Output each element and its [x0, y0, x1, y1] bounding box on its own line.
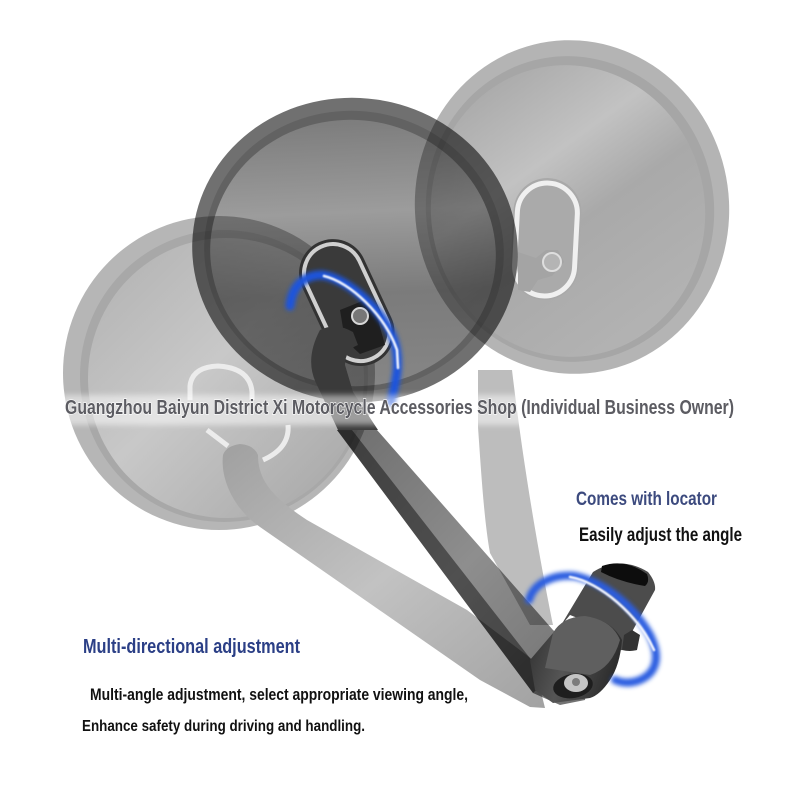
banner band — [62, 395, 752, 425]
right ghost mirror — [393, 20, 751, 394]
locator joint — [530, 563, 655, 703]
heading: multi-directional: Multi-directional adjustment — [83, 636, 300, 658]
central dark arm — [337, 430, 590, 705]
mirror slot — [288, 228, 406, 377]
left ghost mirror — [63, 216, 375, 530]
heading: comes with locator: Comes with locator — [576, 489, 717, 510]
mirror arm neck — [311, 326, 378, 430]
left ghost arm — [223, 444, 545, 708]
text: multi-angle: Multi-angle adjustment, select appropriate viewing angle, — [90, 685, 468, 704]
central dark mirror — [172, 77, 538, 423]
text: enhance safety: Enhance safety during driving and handling. — [82, 718, 365, 735]
blue arc: locator — [529, 576, 656, 683]
blue arc: mirror — [290, 275, 398, 402]
text: easily adjust: Easily adjust the angle — [579, 525, 742, 546]
right ghost arm — [478, 370, 553, 625]
